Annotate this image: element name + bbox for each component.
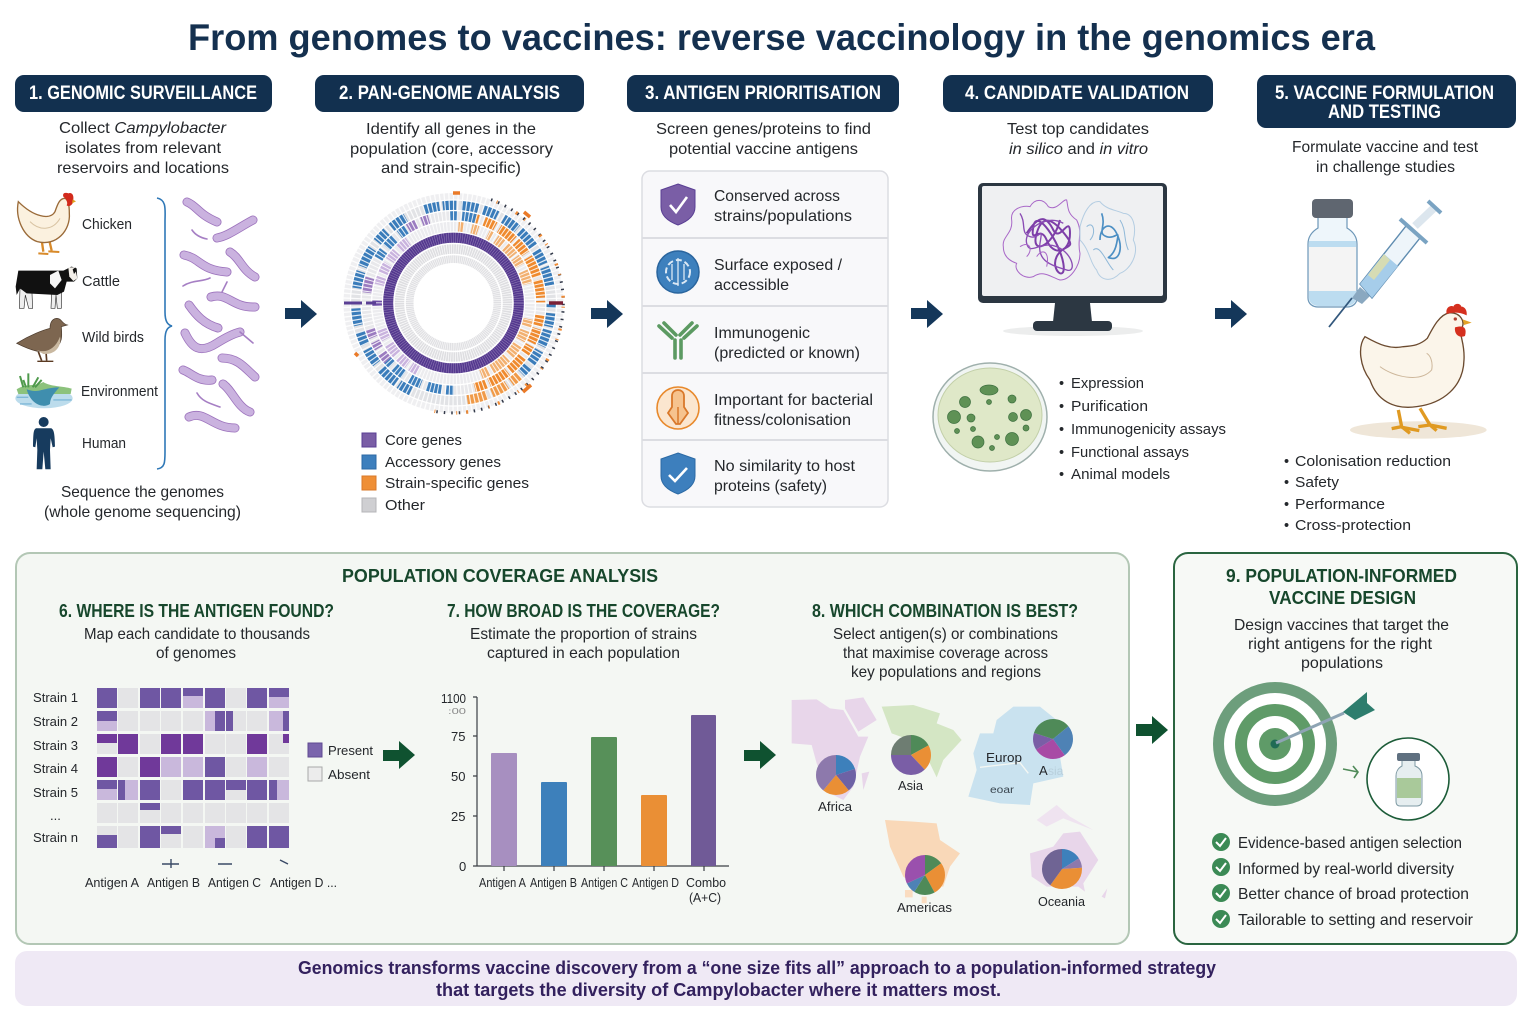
text 8: that maximise coverage across [843, 645, 1048, 662]
checklist [1212, 833, 1474, 929]
text: safety [714, 458, 856, 495]
arrow to design panel [1136, 716, 1168, 744]
strain labels [33, 690, 78, 845]
heading 2 [315, 75, 584, 112]
text: bacterial fitness: Important for bacterial [714, 392, 873, 409]
testing list: Cross-protection [1295, 518, 1411, 534]
heatmap legend: Absent [328, 767, 370, 782]
label: Americas: Americas [897, 900, 952, 915]
footer banner: that targets the diversity of Campylobacter where it matters most. [436, 980, 1001, 1000]
icon: monitor with protein structures [978, 183, 1167, 336]
bar chart: 1100 [441, 691, 466, 706]
heading 4 [943, 75, 1213, 112]
testing list [1284, 454, 1451, 534]
icon: vaccine vial [1308, 199, 1357, 307]
validation list: Expression [1071, 376, 1144, 392]
intro text 4: in silico and in vitro [1009, 141, 1148, 158]
heading 8: 8. WHICH COMBINATION IS BEST? [812, 601, 1078, 621]
bar chart: Combo [686, 875, 726, 890]
panel: 2 pan-genome analysis [315, 75, 584, 514]
text: bacterial fitness [714, 392, 873, 429]
antigen labels: Antigen C [208, 875, 261, 890]
label: Europe map text [986, 750, 1064, 796]
checklist: Informed by real-world diversity [1238, 861, 1454, 878]
pie: Oceania [1052, 859, 1072, 879]
label: Chicken: Chicken [82, 217, 132, 233]
icon: chicken [18, 193, 76, 254]
intro text 4 [1007, 121, 1149, 158]
testing list: • [1284, 497, 1289, 513]
legend: gene types: Strain-specific genes [385, 476, 529, 492]
footer banner [15, 951, 1517, 1006]
bar chart: 0 [459, 859, 466, 874]
legend: gene types: Other [385, 498, 425, 514]
strain labels: Strain 1 [33, 690, 78, 705]
arrow 4 to 5 [1215, 300, 1247, 328]
validation list: • [1059, 445, 1064, 461]
text: conserved: Conserved across [714, 188, 840, 205]
bar chart: Antigen B [530, 875, 577, 890]
heatmap legend [308, 743, 373, 782]
testing list: • [1284, 475, 1289, 491]
icon: syringe [1329, 201, 1441, 327]
intro text 1: reservoirs and locations [57, 160, 229, 177]
intro text 2: and strain-specific) [381, 160, 521, 177]
antigen labels: Antigen B [147, 875, 200, 890]
validation list: • [1059, 399, 1064, 415]
panel: 1 genomic surveillance [15, 75, 272, 521]
intro text 2: Identify all genes in the [366, 121, 536, 138]
intro text 3 [656, 121, 871, 158]
panel heading: POPULATION COVERAGE ANALYSIS [342, 566, 658, 586]
heatmap legend: Present [328, 743, 373, 758]
brace [157, 198, 172, 469]
validation list: Immunogenicity assays [1071, 422, 1226, 438]
bar chart: 50 [451, 769, 465, 784]
icon: environment [15, 373, 73, 408]
label: Europe map text: Europ [986, 750, 1022, 765]
strain labels: Strain 4 [33, 761, 78, 776]
legend: gene types: Core genes [385, 433, 462, 449]
bar chart: 25 [451, 809, 465, 824]
icon: target with dart [1213, 682, 1375, 806]
icon: petri dish [933, 363, 1047, 471]
section 8 [792, 601, 1107, 915]
panel: 5 vaccine formulation [1257, 75, 1516, 534]
text: sequence the genomes: Sequence the genomes [61, 484, 224, 501]
testing list: Colonisation reduction [1295, 454, 1451, 470]
regional maps [792, 697, 1107, 903]
strain labels: Strain 3 [33, 738, 78, 753]
heading 4: 4. CANDIDATE VALIDATION [965, 83, 1189, 104]
label: Asia: Asia [898, 778, 924, 793]
panel: population coverage analysis [16, 553, 1129, 944]
pie: Europe [1043, 729, 1063, 749]
icon: human [33, 417, 55, 469]
intro text 2: population (core, accessory [350, 141, 553, 158]
icon: antibody [659, 323, 697, 358]
text 8: Select antigen(s) or combinations [833, 626, 1058, 643]
arrow 1 to 2 [285, 300, 317, 328]
panel: 9 population-informed vaccine design [1174, 553, 1517, 944]
antigen labels [85, 875, 337, 890]
intro text 4: Test top candidates [1007, 121, 1149, 138]
text: surface exposed [714, 257, 843, 294]
text 7: Estimate the proportion of strains [470, 626, 697, 643]
text: safety: proteins (safety) [714, 478, 827, 495]
panel: 3 antigen prioritisation [627, 75, 899, 507]
icon: safety shield [661, 453, 695, 494]
heading 1 [15, 75, 272, 112]
validation list: Animal models [1071, 467, 1170, 483]
testing list: Performance [1295, 497, 1385, 513]
bar chart: Antigen D [632, 875, 679, 890]
arrow 7 to 8 [744, 741, 776, 769]
text 7 [470, 626, 697, 662]
legend: gene types [362, 433, 529, 514]
bar chart: Antigen C [581, 875, 628, 890]
heading 2: 2. PAN-GENOME ANALYSIS [339, 83, 560, 104]
testing list: Safety [1295, 475, 1340, 491]
icon: wild bird [17, 318, 67, 361]
arrow 6 to 7 [383, 741, 415, 769]
text 9: Design vaccines that target the [1234, 617, 1449, 634]
heading 3: 3. ANTIGEN PRIORITISATION [645, 83, 881, 104]
heading 7: 7. HOW BROAD IS THE COVERAGE? [447, 601, 720, 621]
label: Europe map text: sia [1048, 764, 1064, 778]
validation list: Purification [1071, 399, 1148, 415]
title: From genomes to vaccines: reverse vaccinology in the genomics era [188, 17, 1375, 58]
legend: gene types: Accessory genes [385, 455, 501, 471]
text 6 [84, 626, 310, 662]
icon: surface exposed [657, 251, 699, 293]
text: surface exposed: Surface exposed / [714, 257, 843, 274]
text: immunogenic: (predicted or known) [714, 345, 860, 362]
icon: hen [1350, 304, 1487, 439]
heading 1: 1. GENOMIC SURVEILLANCE [29, 83, 257, 104]
arrow 3 to 4 [911, 300, 943, 328]
testing list: • [1284, 454, 1289, 470]
text: sequence the genomes: (whole genome sequencing) [44, 504, 241, 521]
text 6: Map each candidate to thousands [84, 626, 310, 643]
heading 6: 6. WHERE IS THE ANTIGEN FOUND? [59, 601, 334, 621]
icon: bacterial fitness [657, 387, 699, 429]
testing list: • [1284, 518, 1289, 534]
text: bacterial fitness: fitness/colonisation [714, 412, 851, 429]
bar chart: Antigen A [479, 875, 526, 890]
heading 9: VACCINE DESIGN [1269, 588, 1416, 608]
criteria card stack [642, 171, 888, 507]
validation list: • [1059, 422, 1064, 438]
section 6 [33, 601, 373, 890]
text 9: right antigens for the right [1248, 636, 1433, 653]
bacteria cluster [183, 202, 255, 428]
text: immunogenic [714, 325, 860, 362]
icon: vial in circle [1367, 738, 1449, 820]
text 9: populations [1301, 655, 1383, 672]
footer banner: Genomics transforms vaccine discovery from a “one size fits all” approach to a population-informed strategy [298, 958, 1216, 978]
strain labels: Strain 2 [33, 714, 78, 729]
text: conserved [714, 188, 852, 225]
checklist: Better chance of broad protection [1238, 886, 1469, 903]
checklist: Evidence-based antigen selection [1238, 835, 1462, 852]
arrow 2 to 3 [591, 300, 623, 328]
text: surface exposed: accessible [714, 277, 789, 294]
label: Oceania: Oceania [1038, 894, 1086, 909]
heading 9 [1226, 566, 1457, 608]
antigen labels: Antigen D ... [270, 875, 337, 890]
intro text 1: isolates from relevant [65, 140, 222, 157]
icon: conserved shield [661, 184, 695, 225]
intro text 5 [1292, 139, 1479, 176]
heading 5 [1257, 75, 1516, 128]
heading 5: AND TESTING [1328, 102, 1441, 123]
bar chart: (A+C) [689, 890, 721, 905]
label: Europe map text: eoar [990, 785, 1015, 796]
intro text 5: in challenge studies [1316, 159, 1455, 176]
label: Human: Human [82, 436, 126, 452]
text: conserved: strains/populations [714, 208, 852, 225]
validation list [1059, 376, 1226, 483]
pie: Americas [915, 865, 935, 885]
strain labels: ... [50, 808, 61, 823]
validation list: Functional assays [1071, 445, 1189, 461]
checklist: Tailorable to setting and reservoir [1238, 912, 1474, 929]
label: Cattle: Cattle [82, 274, 120, 290]
section 7 [441, 601, 729, 905]
text 8 [833, 626, 1058, 681]
pie: Asia [901, 745, 921, 765]
heading 3 [627, 75, 899, 112]
intro text 5: Formulate vaccine and test [1292, 139, 1479, 156]
text 7: captured in each population [487, 645, 680, 662]
text: safety: No similarity to host [714, 458, 856, 475]
validation list: • [1059, 467, 1064, 483]
intro text 1 [57, 120, 229, 177]
label: Africa: Africa [818, 799, 853, 814]
heading 5: 5. VACCINE FORMULATION [1275, 83, 1494, 104]
label: Environment: Environment [81, 384, 158, 400]
intro text 1: Collect Campylobacter [59, 120, 227, 137]
text: immunogenic: Immunogenic [714, 325, 810, 342]
text 8: key populations and regions [851, 664, 1041, 681]
intro text 3: Screen genes/proteins to find [656, 121, 871, 138]
heading 9: 9. POPULATION-INFORMED [1226, 566, 1457, 586]
circular pan-genome plot [344, 193, 563, 413]
bar chart: 75 [451, 729, 465, 744]
presence absence heatmap [97, 688, 289, 848]
strain labels: Strain 5 [33, 785, 78, 800]
antigen labels: Antigen A [85, 875, 139, 890]
icon: cattle [16, 267, 77, 308]
icon: arrow to vial [1343, 766, 1358, 778]
validation list: • [1059, 376, 1064, 392]
bar chart: :00 [448, 707, 467, 716]
text 6: of genomes [156, 645, 236, 662]
label: Wild birds: Wild birds [82, 330, 144, 346]
panel: 4 candidate validation [933, 75, 1226, 483]
text 9 [1234, 617, 1449, 672]
bar chart [441, 691, 729, 905]
label: Europe map text: A [1039, 763, 1048, 778]
text: sequence the genomes [44, 484, 241, 521]
intro text 3: potential vaccine antigens [669, 141, 858, 158]
pie: Africa [826, 765, 846, 785]
intro text 2 [350, 121, 553, 177]
strain labels: Strain n [33, 830, 78, 845]
